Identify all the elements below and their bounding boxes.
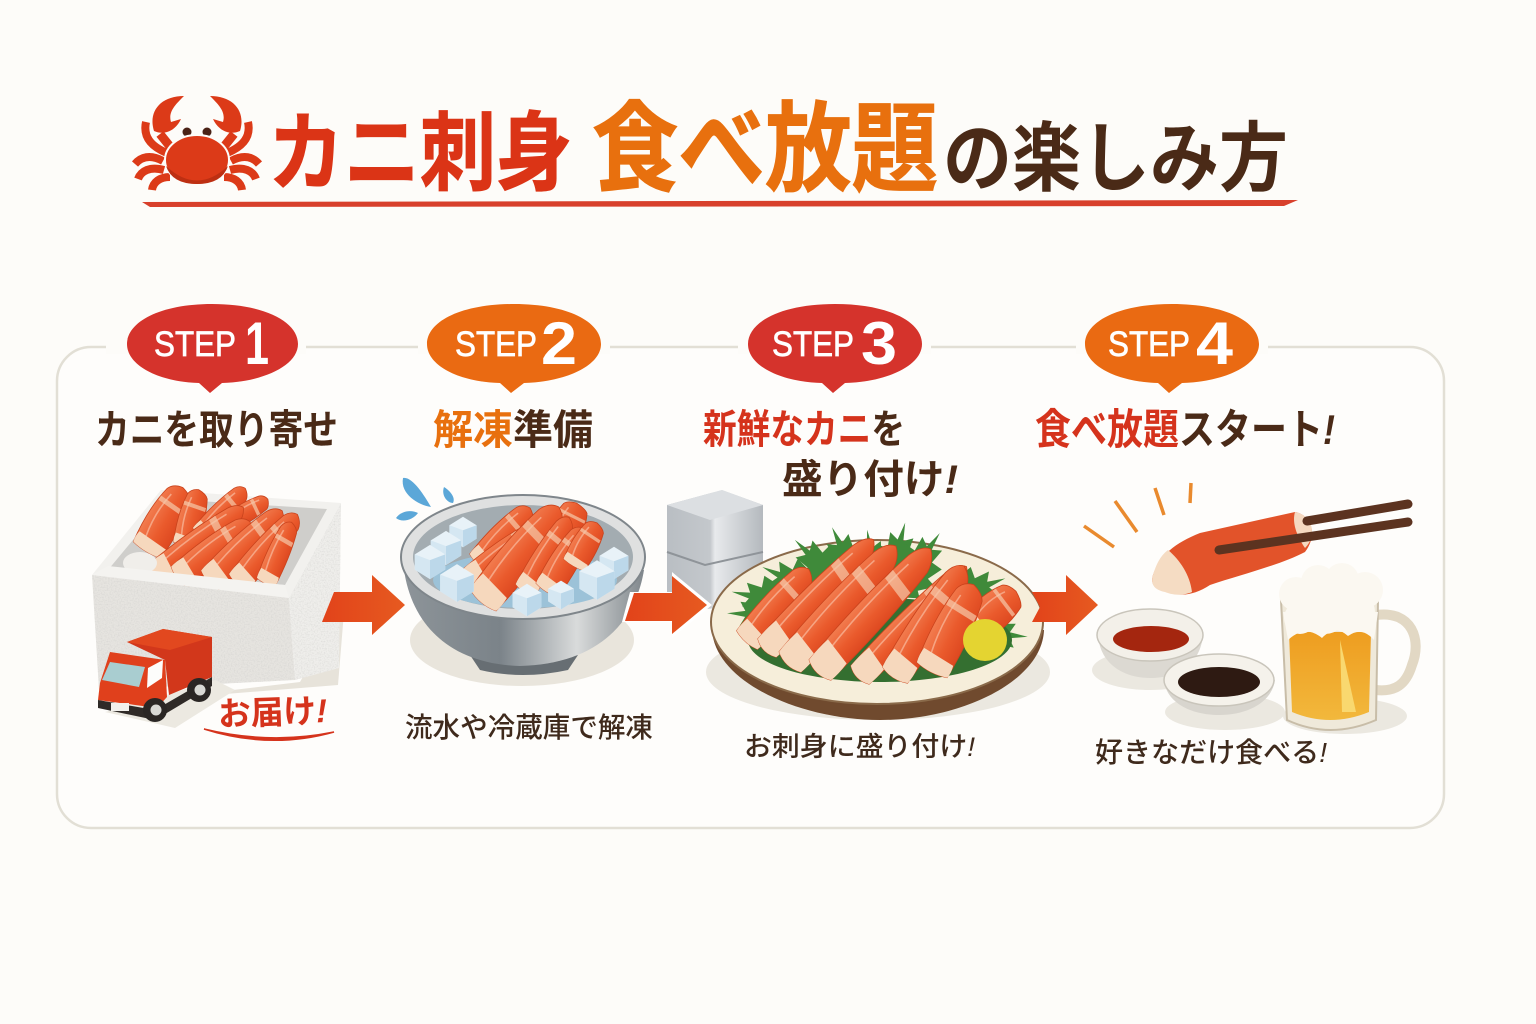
badge: step 2: STEP <box>455 325 537 364</box>
beer foam <box>1279 563 1383 640</box>
badge: step 1: STEP <box>154 325 236 364</box>
title text: how to enjoy: の楽しみ方 <box>943 117 1288 202</box>
icon: crab <box>135 96 259 190</box>
badge: step 3: STEP <box>772 325 854 364</box>
heading: thaw prep: 解凍準備 <box>433 407 593 453</box>
illustration: crab leg with chopsticks <box>1152 504 1408 595</box>
icon: excitement lines <box>1084 483 1191 547</box>
underline swoosh <box>204 729 334 740</box>
arrow 2 <box>622 572 712 638</box>
icon: delivery truck <box>98 629 235 728</box>
heading: order the crab: カニを取り寄せ <box>95 407 338 453</box>
heading: plate fresh crab: 新鮮なカニを <box>703 408 905 452</box>
badge: step 1: 1 <box>245 310 269 377</box>
caption: plate as sashimi: お刺身に盛り付け ! <box>744 732 976 762</box>
step 2 <box>396 304 653 743</box>
illustration: steel refrigerator blocks <box>667 490 763 610</box>
illustration: bowl of crab legs and ice <box>401 495 645 686</box>
title <box>135 94 1298 207</box>
illustration: foam box with crab legs <box>92 479 345 700</box>
label: delivered: お届け! <box>217 692 328 733</box>
title text: all you can eat: 食べ放題 <box>592 94 938 204</box>
title text: crab sashimi: カニ刺身 <box>268 106 572 202</box>
badge: step 2: 2 <box>541 310 577 377</box>
badge: step 2 <box>427 304 601 393</box>
badge: step 3: 3 <box>861 310 897 377</box>
arrow 3 <box>1032 575 1098 635</box>
illustration: sashimi platter <box>706 516 1050 720</box>
arrow 2 fill <box>625 576 707 634</box>
badge: step 3 <box>748 304 922 393</box>
arrow 1 <box>322 575 405 635</box>
caption: eat as much as you like: 好きなだけ食べる! <box>1095 737 1327 768</box>
panel: steps frame <box>57 347 1444 828</box>
step 4 <box>1035 304 1416 768</box>
title underline <box>142 200 1298 207</box>
icon: water drops <box>396 478 454 520</box>
heading: start eating: 食べ放題スタート! <box>1035 406 1335 453</box>
step 1 <box>92 304 345 740</box>
badge: step 4 <box>1085 304 1259 393</box>
badge: step 4: 4 <box>1196 310 1234 377</box>
step 3 <box>703 304 1050 762</box>
caption: thaw: 流水や冷蔵庫で解凍 <box>405 712 653 743</box>
illustration: sauce dishes <box>1092 609 1285 730</box>
badge: step 4: STEP <box>1108 325 1190 364</box>
badge: step 1 <box>127 304 298 393</box>
illustration: beer mug <box>1279 563 1416 734</box>
heading: plate fresh crab line 2: 盛り付け! <box>782 458 958 502</box>
